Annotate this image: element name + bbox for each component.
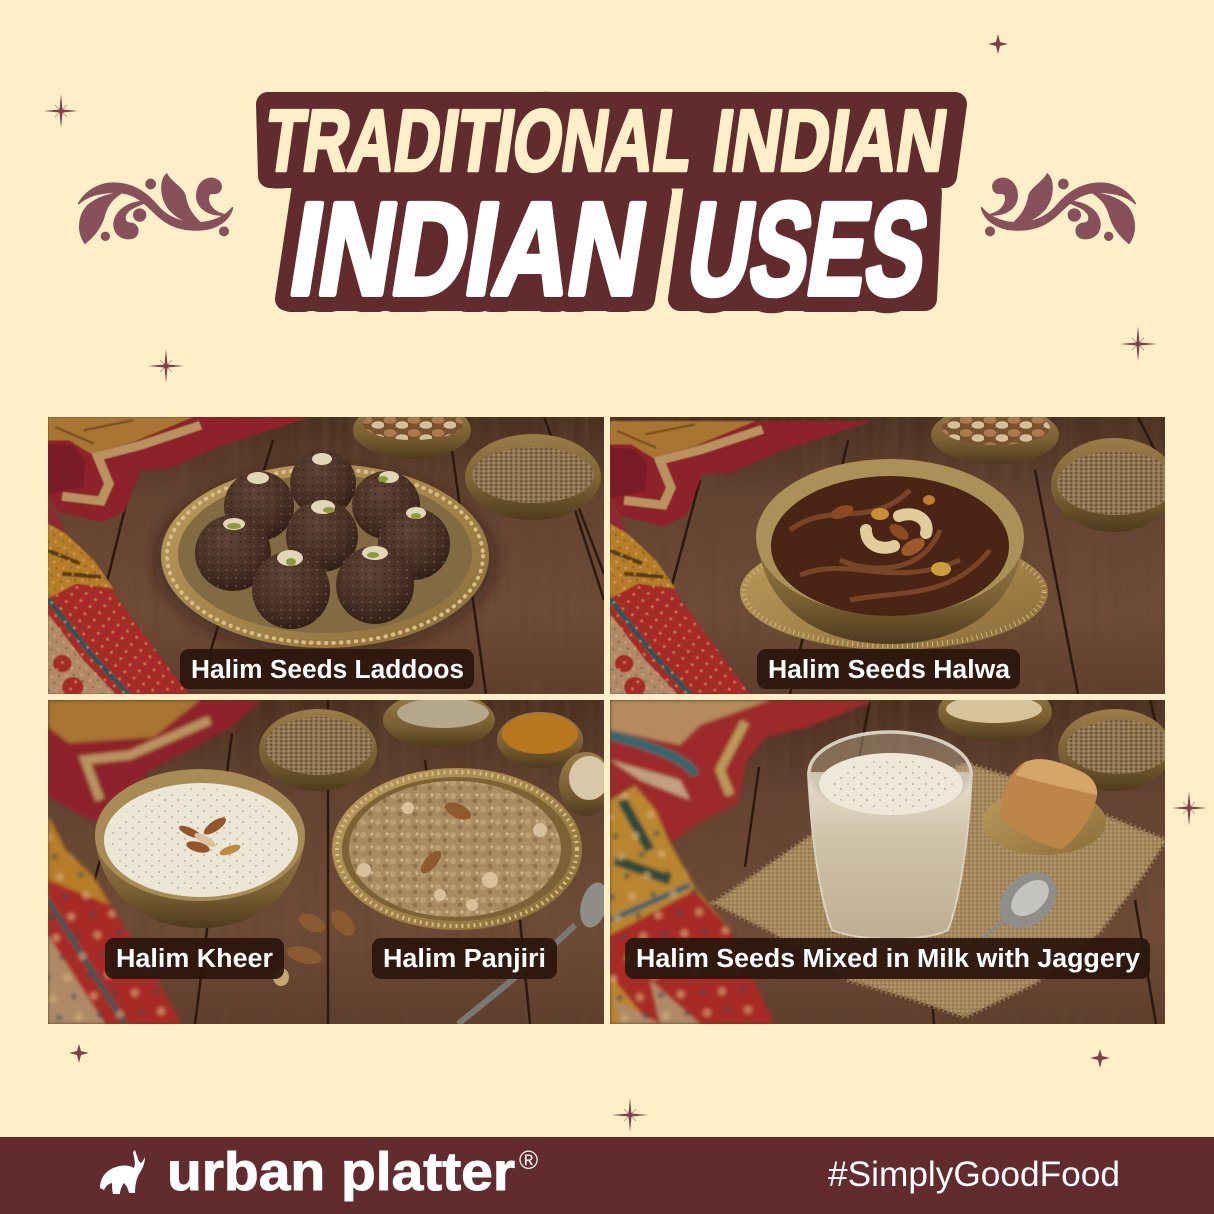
wood table (610, 700, 1165, 1024)
brass plate (740, 558, 1048, 649)
ornament: left flourish (78, 174, 233, 243)
title outline backing: USES (679, 176, 938, 322)
pale seed bowl (383, 700, 495, 748)
label: Halim Panjiri: Halim Panjiri (383, 945, 546, 973)
title outline backing: INDIAN (282, 176, 656, 322)
cashew bowl (559, 752, 604, 816)
label: Halim Seeds Halwa: Halim Seeds Halwa (768, 656, 1011, 684)
cashews and nuts (829, 495, 951, 576)
panel: halwa photo (610, 406, 1177, 697)
label: Halim Panjiri (372, 938, 557, 979)
spoon (975, 861, 1068, 945)
cloth: lower left (610, 495, 750, 697)
title outline backing: TRADITIONAL (259, 92, 699, 189)
seed bowl (1058, 709, 1172, 791)
label: Halim Seeds Laddoos (180, 649, 474, 689)
turmeric bowl (497, 712, 583, 768)
laddoo toppings (223, 453, 426, 566)
label: Halim Seeds Halwa (757, 649, 1020, 689)
title outline backing: INDIAN (707, 92, 953, 189)
registered mark: ® (519, 1145, 538, 1175)
nut bowl (938, 700, 1052, 741)
hashtag: #SimplyGoodFood (828, 1155, 1120, 1194)
ornament: right flourish (981, 174, 1136, 243)
label: Halim Seeds Mixed in Milk with Jaggery (625, 938, 1150, 979)
wood table (48, 700, 604, 1024)
cloth: lower left (48, 495, 188, 697)
panel: laddoos photo (48, 401, 604, 697)
cloth: lower left (610, 785, 775, 1024)
almonds (273, 910, 355, 986)
label: Halim Kheer: Halim Kheer (116, 945, 273, 973)
nut bowl (931, 417, 1059, 464)
label: Halim Seeds Laddoos: Halim Seeds Laddoos (191, 656, 464, 684)
glass of milk (808, 732, 972, 939)
cloth: top left (48, 700, 262, 822)
burlap mat (713, 763, 1166, 1017)
cloth: lower left (48, 815, 182, 1024)
footer band (0, 1137, 1214, 1214)
brand name: urban platter (167, 1142, 515, 1202)
cloth: top left (48, 417, 310, 522)
title line two: INDIAN (282, 176, 656, 322)
icon: elephant logo (100, 1150, 145, 1194)
halwa bowl (756, 459, 1024, 644)
panel: kheer and panjiri photo (48, 692, 613, 1024)
kheer bowl (95, 769, 305, 928)
jaggery on saucer (982, 759, 1106, 855)
title line one: INDIAN (707, 92, 953, 189)
title (259, 92, 955, 322)
seed bowl (1051, 438, 1177, 532)
label: Halim Seeds Mixed in Milk with Jaggery: Halim Seeds Mixed in Milk with Jaggery (636, 945, 1141, 973)
wood table (48, 417, 604, 694)
cloth: top left (610, 421, 872, 526)
panjiri plate (332, 768, 582, 930)
seed bowl (259, 709, 377, 791)
title outline backing (259, 92, 955, 322)
panel: milk with jaggery photo (610, 683, 1172, 1024)
title line two: USES (679, 176, 938, 322)
brass plate (155, 464, 495, 653)
nut bowl (353, 417, 471, 459)
label: Halim Kheer (105, 938, 284, 979)
cloth: top left (610, 700, 876, 843)
seed bowl (465, 434, 601, 520)
laddoo texture (195, 450, 450, 629)
spoon (458, 879, 613, 1024)
title line one: TRADITIONAL (259, 92, 699, 189)
laddoos (195, 450, 450, 629)
wood table (610, 417, 1165, 694)
